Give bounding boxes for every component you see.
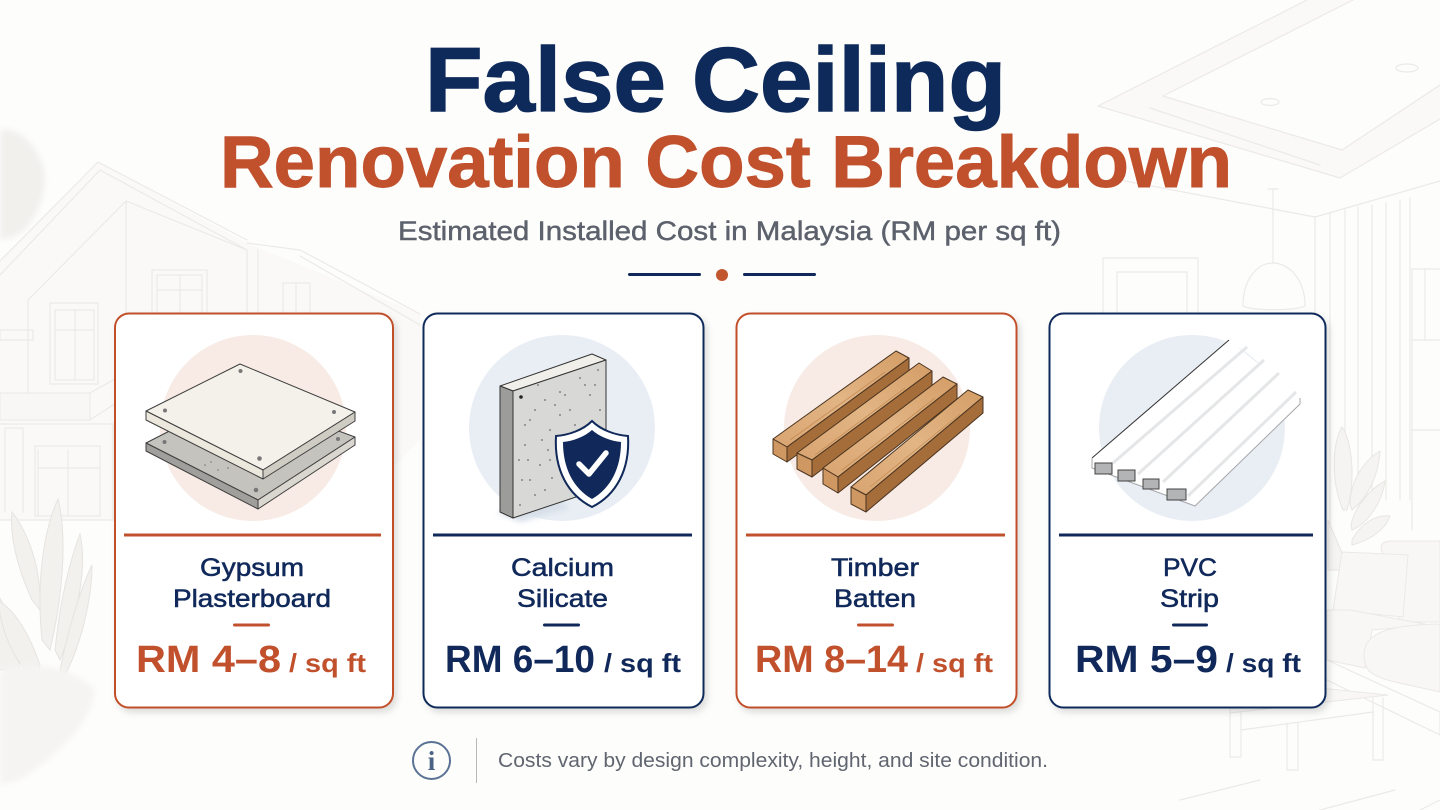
price	[136, 639, 366, 681]
price: RM 8–14	[755, 639, 908, 681]
recessed lights	[1396, 64, 1418, 72]
room plant	[1328, 427, 1390, 570]
curtains	[1315, 198, 1410, 640]
divider	[1059, 534, 1313, 536]
icon: calcium silicate board with shield	[469, 335, 655, 522]
price: RM 4–8	[136, 639, 281, 681]
price: RM 6–10	[445, 639, 595, 681]
lower floor	[0, 428, 113, 520]
dash	[857, 624, 894, 626]
background illustration: living room sketch	[1098, 0, 1440, 810]
subtitle: Estimated Installed Cost in Malaysia (RM per sq ft)	[398, 216, 1061, 246]
upper windows	[50, 303, 98, 384]
title: False Ceiling	[425, 30, 1006, 131]
material name: PVC	[1163, 554, 1217, 582]
divider	[433, 534, 692, 536]
material name: Timber	[831, 554, 919, 582]
price: / sq ft	[289, 648, 366, 678]
speckle texture	[518, 369, 601, 506]
dash	[1172, 624, 1208, 626]
material name	[511, 554, 614, 613]
material name	[173, 554, 331, 613]
price: / sq ft	[604, 648, 681, 678]
material name	[831, 554, 919, 613]
price: / sq ft	[1226, 648, 1301, 678]
icon: timber battens	[773, 335, 983, 521]
material name: Gypsum	[200, 554, 304, 582]
panel: timber batten	[736, 314, 1016, 708]
price	[1075, 639, 1301, 681]
ground shrubs	[0, 665, 95, 785]
material name: Silicate	[517, 585, 608, 613]
wood grain	[790, 372, 960, 487]
wall lines, door frame	[1103, 180, 1440, 312]
material name: Calcium	[511, 554, 614, 582]
price	[755, 639, 993, 681]
price: RM 5–9	[1075, 639, 1218, 681]
material name: Batten	[834, 585, 916, 613]
price: / sq ft	[916, 648, 993, 678]
dash	[543, 624, 580, 626]
coffee table	[1230, 688, 1388, 713]
material name	[1160, 554, 1219, 613]
title	[220, 30, 1232, 203]
pendant lamp	[1243, 189, 1305, 310]
background illustration: house sketch	[0, 129, 420, 785]
plant	[0, 499, 92, 680]
icon: info: i	[428, 746, 436, 776]
icon: gypsum boards	[146, 335, 355, 521]
footnote text: Costs vary by design complexity, height, and site condition.	[498, 750, 1048, 772]
sofa	[1381, 541, 1440, 622]
tree	[0, 129, 45, 240]
panel: gypsum plasterboard	[115, 314, 393, 708]
dash	[233, 624, 270, 626]
panel: pvc strip	[1050, 314, 1326, 708]
panel: calcium silicate	[424, 314, 704, 708]
material name: Plasterboard	[173, 585, 331, 613]
divider	[746, 534, 1005, 536]
divider	[124, 534, 381, 536]
footnote	[413, 738, 1048, 783]
title divider	[628, 269, 816, 281]
price	[445, 639, 681, 681]
icon: info	[413, 742, 450, 779]
balcony	[0, 393, 90, 420]
window	[1412, 269, 1440, 530]
icon: pvc strip	[1092, 335, 1300, 521]
subtitle heading: Renovation Cost Breakdown	[220, 122, 1232, 203]
material name: Strip	[1160, 585, 1219, 613]
